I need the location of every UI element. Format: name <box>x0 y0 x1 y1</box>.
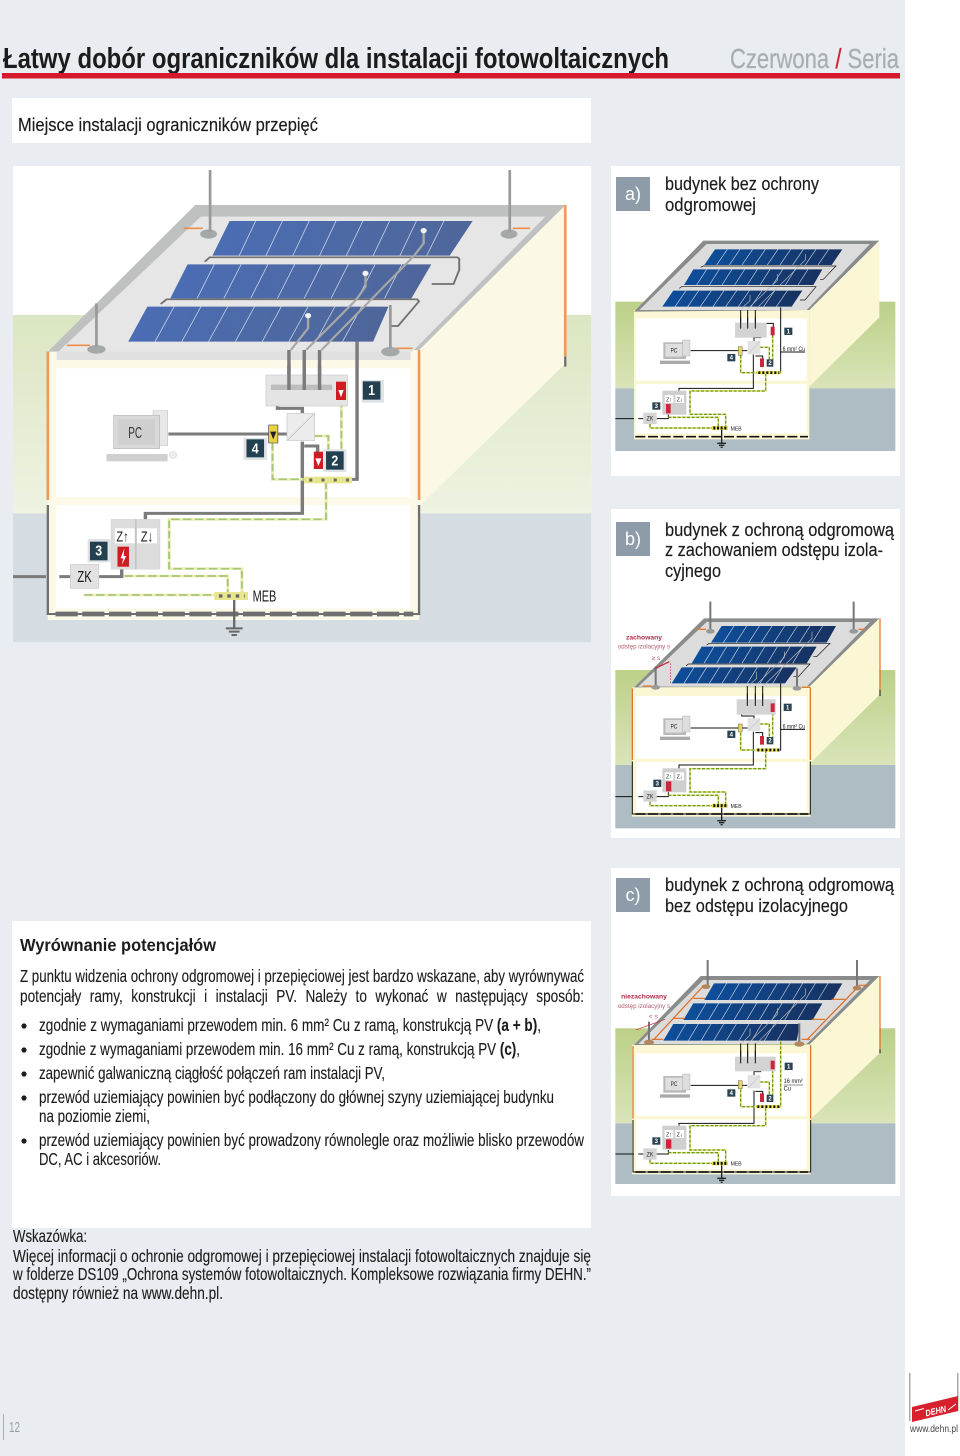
diagram b: 2 <box>768 739 772 745</box>
label 1: 1 <box>368 383 375 399</box>
heading c: bez odstępu izolacyjnego <box>665 895 848 916</box>
diagram b: 3 <box>656 781 660 787</box>
meter cabinet: Z↓ <box>141 530 153 545</box>
intro text: Z punktu widzenia ochrony odgromowej i przepięciowej jest bardzo wskazane, aby wyrównywać <box>20 966 584 986</box>
diagram c: PC <box>671 1081 677 1088</box>
heading c: budynek z ochroną odgromową <box>665 874 895 895</box>
label 1 <box>362 380 384 403</box>
isolation distance callout: ≥ s <box>652 655 660 662</box>
badge b <box>616 522 650 556</box>
surge protectors <box>269 425 323 469</box>
diagram c: 1 <box>787 1064 791 1070</box>
diagram a: 2 <box>768 361 772 367</box>
heading a <box>665 173 820 215</box>
bullet list: przewód uziemiający powinien być prowadzony równolegle oraz możliwie blisko przewodów <box>39 1130 584 1150</box>
isolation distance callout c: < s <box>649 1013 658 1020</box>
ZK box: ZK <box>77 567 92 586</box>
title: Łatwy dobór ograniczników dla instalacji fotowoltaicznych <box>3 43 669 75</box>
lightning rods <box>67 170 530 356</box>
inverter <box>287 413 315 441</box>
panel: variant b <box>611 509 900 838</box>
panel: section heading: Miejsce instalacji ograniczników przepięć <box>18 114 318 135</box>
MEB bar <box>214 588 276 605</box>
panel: variant a <box>611 166 900 476</box>
diagram a: Z↓ <box>677 397 683 403</box>
solar panel rows <box>128 221 473 350</box>
diagram b <box>615 602 895 828</box>
diagram b: 4 <box>730 732 734 738</box>
hint text: Więcej informacji o ochronie odgromowej i przepięciowej instalacji fotowoltaicznych znajduje się <box>13 1246 591 1266</box>
diagram a: Z↑ <box>666 397 672 403</box>
diagram c: ZK <box>647 1152 653 1158</box>
hint text <box>12 1226 591 1303</box>
diagram a: ZK <box>647 417 653 423</box>
hint text: w folderze DS109 „Ochrona systemów fotowoltaicznych. Kompleksowe rozwiązania firmy DEHN.” <box>12 1264 591 1284</box>
badge b: b) <box>625 529 641 549</box>
diagram b: Z↑ <box>666 775 672 781</box>
PC: PC <box>128 423 142 442</box>
badge a: a) <box>625 184 641 204</box>
diagram a: PC <box>671 348 677 355</box>
badge a <box>616 177 650 211</box>
heading a: odgromowej <box>665 194 756 215</box>
lightning rods and roof conductors c <box>644 960 868 1047</box>
meter cabinet: Z↑ <box>116 530 129 545</box>
panel: variant c <box>611 868 900 1196</box>
diagram a: 4 <box>730 356 734 362</box>
diagram c: Cu <box>784 1087 791 1093</box>
diagram b: 6 mm² Cu <box>783 723 805 730</box>
diagram a: MEB <box>731 426 742 432</box>
main building diagram <box>13 166 591 642</box>
bullet list: zgodnie z wymaganiami przewodem min. 6 mm² Cu z ramą, konstrukcją PV (a + b), <box>39 1015 541 1035</box>
bullet list: zgodnie z wymaganiami przewodem min. 16 mm² Cu z ramą, konstrukcją PV (c), <box>39 1039 520 1059</box>
hint text: Wskazówka: <box>13 1226 87 1246</box>
diagram c: MEB <box>731 1162 742 1168</box>
DEHN logo <box>909 1373 958 1435</box>
earthing bar <box>304 477 352 483</box>
PV combiner box <box>266 367 347 406</box>
wiring <box>13 342 357 635</box>
label 4 <box>243 438 267 460</box>
bullet list: DC, AC i akcesoriów. <box>39 1149 161 1169</box>
isolation distance callout: zachowany <box>626 634 663 641</box>
diagram c <box>615 960 895 1184</box>
isolation distance callout c: niezachowany <box>621 993 667 1000</box>
label 2 <box>323 449 346 472</box>
isolation distance callout: odstęp izolacyjny s <box>618 643 670 650</box>
heading b <box>665 519 895 581</box>
panel: equipotential bonding <box>12 921 591 1228</box>
label 3: 3 <box>95 543 102 559</box>
label 2: 2 <box>331 453 338 469</box>
diagram c: 3 <box>655 1139 659 1145</box>
bullet list: zapewnić galwaniczną ciągłość połączeń ram instalacji PV, <box>39 1063 385 1083</box>
label 3 <box>88 539 111 562</box>
bullet list: na poziomie ziemi, <box>39 1106 150 1126</box>
page number <box>3 1414 20 1440</box>
series label: Czerwona / Seria <box>730 43 899 74</box>
diagram b: 1 <box>786 705 790 711</box>
diagram c: Z↓ <box>677 1132 683 1138</box>
badge c: c) <box>626 885 640 905</box>
page number: 12 <box>9 1419 20 1436</box>
isolation distance callout c: odstęp izolacyjny s <box>618 1003 670 1010</box>
DEHN logo: DEHN <box>924 1404 947 1418</box>
diagram b: ZK <box>647 794 653 800</box>
isolation distance callout c <box>618 993 670 1030</box>
hint text: dostępny również na www.dehn.pl. <box>13 1283 223 1303</box>
badge c <box>616 878 650 912</box>
heading b: cyjnego <box>665 560 721 581</box>
heading b: budynek z ochroną odgromową <box>665 519 895 540</box>
diagram c: 4 <box>730 1091 734 1097</box>
label 4: 4 <box>252 441 259 457</box>
down conductors and ring earth <box>48 205 565 614</box>
intro text <box>20 966 584 1006</box>
title rule <box>2 73 900 78</box>
diagram c: 16 mm² <box>784 1079 803 1085</box>
meter cabinet <box>111 519 160 569</box>
heading c <box>665 874 895 916</box>
diagram a: 6 mm² Cu <box>783 346 805 353</box>
diagram b: PC <box>671 724 677 731</box>
bullet list: przewód uziemiający powinien być podłączony do głównej szyny uziemiającej budynku <box>39 1087 554 1107</box>
MEB bar: MEB <box>253 588 276 605</box>
bullet list <box>21 1015 584 1169</box>
intro text: potencjały ramy, konstrukcji i instalacji PV. Należy to wykonać w następujący sposób: <box>20 986 584 1006</box>
heading a: budynek bez ochrony <box>665 173 820 194</box>
diagram a: 3 <box>655 404 659 410</box>
heading b: z zachowaniem odstępu izola- <box>665 539 883 560</box>
heading: Wyrównanie potencjałów <box>20 935 216 955</box>
diagram a: 1 <box>787 329 791 335</box>
diagram a <box>615 241 895 451</box>
PC <box>106 411 177 461</box>
diagram b: Z↓ <box>677 775 683 781</box>
diagram b: MEB <box>731 804 742 810</box>
lightning rods b <box>643 602 865 691</box>
isolation distance callout <box>618 634 670 683</box>
ZK box <box>70 564 99 588</box>
panel: section heading <box>12 98 591 143</box>
diagram c: 2 <box>768 1096 772 1102</box>
diagram c: Z↑ <box>666 1132 672 1138</box>
